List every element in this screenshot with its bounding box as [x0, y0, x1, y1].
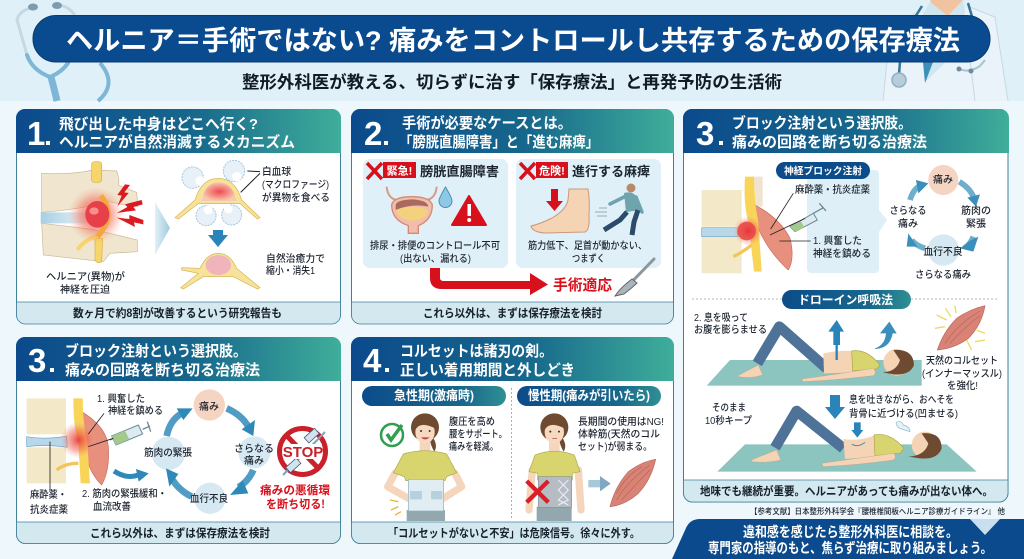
illustration: herniated disc pressing nerve [41, 162, 143, 263]
illustration: inhale pose on mat [707, 320, 922, 386]
icon: stop sign [280, 428, 326, 475]
callout: light blue box [807, 170, 887, 273]
label: keep ten seconds [705, 402, 752, 427]
label: hernia compresses nerve: 神経を圧迫 [60, 283, 110, 296]
panel 4 footer [352, 522, 674, 544]
label: calm nerve: 1. 興奮した [813, 234, 862, 247]
label: bladder text: (出ない、漏れる) [400, 252, 471, 265]
icon: water drop [439, 187, 452, 208]
illustration: woman wearing corset smiling [388, 413, 462, 521]
chart: pain cycle: 痛み [898, 217, 918, 230]
chart: vicious cycle of pain: 血行不良 [190, 492, 228, 505]
label: white blood cells: (マクロファージ) [262, 179, 329, 191]
pill: nerve block injection: 神経ブロック注射 [784, 164, 862, 178]
label: acute text: 痛みを軽減。 [449, 440, 498, 453]
panel header [16, 337, 341, 381]
panel footer: これら以外は、まずは保存療法を検討 [90, 526, 270, 540]
label: calm nerve [97, 392, 163, 417]
icon: red X [520, 163, 535, 179]
label: anesthetic: 麻酔薬・抗炎症薬 [795, 183, 870, 196]
panel 4 header: 4 [363, 342, 382, 379]
illustration: woman with corset warning [527, 413, 656, 521]
title banner: ヘルニア＝手術ではない? 痛みをコントロールし共存するための保存療法 [66, 26, 960, 56]
panel: 3 block injection lower left [16, 337, 341, 544]
panel 1 header: 1 [27, 115, 45, 152]
panel 1 header: ヘルニアが自然消滅するメカニズム [59, 133, 295, 151]
panel 2 header: 2 [364, 115, 382, 152]
panel 4 header [351, 337, 674, 381]
badge: danger: 危険! [539, 164, 565, 178]
panel: 4 corset [351, 337, 674, 544]
illustration: stumbling person [595, 184, 642, 235]
panel 2 header [351, 109, 674, 153]
panel 2 header: 「膀胱直腸障害」と「進む麻痺」 [399, 133, 599, 151]
label: chronic text: セット)が弱まる。 [578, 440, 652, 453]
label: white blood cells: が異物を食べる [262, 191, 330, 204]
right panel header [683, 109, 1009, 153]
chart: vicious cycle of pain: 筋肉の緊張 [144, 446, 192, 459]
arrow: down [208, 230, 228, 247]
label: chronic text: 体幹筋(天然のコル [578, 428, 660, 440]
panel: 1 natural resorption [16, 109, 341, 324]
icon: red X [367, 163, 382, 179]
label: break vicious cycle [260, 483, 331, 511]
chart: pain cycle: 血行不良 [924, 245, 962, 258]
label: calm nerve: 1. 興奮した [97, 392, 145, 405]
panel 1 footer [16, 302, 340, 324]
label: exhale [849, 393, 958, 420]
pill: nerve block injection [776, 162, 870, 179]
label: acute text: 腰をサポート。 [449, 428, 507, 440]
sub-panel: progressive paralysis [516, 159, 661, 268]
badge: urgent [383, 162, 416, 178]
label: paralysis text: つまずく [572, 253, 605, 265]
heading: paralysis: 進行する麻痺 [572, 164, 650, 179]
chart: vicious cycle of pain: さらなる [234, 443, 274, 455]
label: anesthetic: 抗炎症薬 [30, 503, 68, 516]
panel 4 header: コルセットは諸刃の剣。 [400, 342, 553, 360]
right panel footer [684, 480, 1008, 502]
panel 1 footer: 数ヶ月で約8割が改善するという研究報告も [73, 306, 282, 320]
illustration: macrophages eating hernia [175, 160, 260, 226]
label: muscle relief: 2. 筋肉の緊張緩和・ [82, 487, 167, 500]
panel header: 3 [28, 342, 46, 379]
label: acute text: 腹圧を高め [449, 415, 495, 428]
label: break vicious cycle: 痛みの悪循環 [260, 483, 331, 497]
label: paralysis text [528, 239, 647, 265]
label: muscle relief [82, 487, 167, 513]
panel: 3 block injection and draw-in right [683, 109, 1009, 502]
panel 1 header: 飛び出した中身はどこへ行く? [59, 115, 258, 133]
label: natural corset: 天然のコルセット [926, 354, 998, 367]
pill: chronic phase [517, 386, 661, 406]
sub-panel: bladder and bowel disorder [363, 159, 508, 268]
label: calm nerve: 神経を鎮める [813, 247, 871, 260]
illustration: nerve block anatomy [27, 398, 151, 490]
chart: vicious cycle of pain [144, 389, 274, 514]
pill: draw-in breathing: ドローイン呼吸法 [798, 292, 893, 307]
panel 2 header: 手術が必要なケースとは。 [402, 114, 572, 132]
label: calm nerve [813, 234, 871, 260]
label: white blood cells: 白血球 [262, 165, 291, 178]
label: calm nerve: 神経を鎮める [108, 404, 163, 417]
subtitle: 整形外科医が教える、切らずに治す「保存療法」と再発予防の生活術 [242, 72, 782, 92]
illustration: shrunken hernia [181, 253, 260, 289]
arrow: red down [546, 189, 563, 211]
pill: acute phase: 急性期(激痛時) [394, 388, 474, 403]
label: keep ten seconds: 10秒キープ [705, 414, 752, 427]
label: natural healing: 自然治癒力で [266, 252, 325, 265]
arrow: chevron to next step [155, 202, 170, 255]
label: exhale: 背骨に近づける(凹ませる) [849, 407, 958, 420]
right panel footer: 地味でも継続が重要。ヘルニアがあっても痛みが出ない体へ。 [700, 484, 993, 498]
label: chronic text: 長期間の使用はNG! [578, 415, 664, 428]
label: exhale: 息を吐きながら、おへそを [849, 393, 954, 406]
label: anesthetic [30, 488, 68, 516]
label: bladder text [370, 239, 500, 265]
badge: danger [536, 162, 568, 178]
pill: draw-in breathing [782, 290, 911, 309]
chart: vicious cycle of pain: 痛み [199, 400, 219, 413]
chart: pain cycle [890, 165, 991, 281]
heading: bladder disorder: 膀胱直腸障害 [420, 164, 499, 179]
illustration: exhale pose on mat [717, 411, 977, 472]
label: paralysis text: 筋力低下、足首が動かない、 [528, 239, 647, 252]
label: bladder text: 排尿・排便のコントロール不可 [370, 239, 500, 252]
illustration: injection anatomy [702, 177, 826, 273]
label: natural healing: 縮小・消失1 [266, 264, 315, 277]
illustration: dropped foot [531, 189, 589, 233]
label: muscle relief: 血流改善 [93, 500, 131, 513]
arrow: to cycle [114, 469, 149, 482]
bottom banner: 違和感を感じたら整形外科医に相談を。 [743, 524, 958, 540]
label: anesthetic: 麻酔薬・ [30, 488, 67, 501]
chart: pain cycle: 筋肉の [961, 204, 991, 217]
label: natural corset: (インナーマッスル) [922, 368, 1002, 380]
chart: vicious cycle of pain: 痛み [244, 454, 264, 467]
panel 2 footer [352, 302, 674, 324]
label: break vicious cycle: を断ち切る! [266, 497, 325, 511]
panel header: 痛みの回路を断ち切る治療法 [65, 361, 260, 379]
panel 2 footer: これら以外は、まずは保存療法を検討 [423, 306, 602, 320]
right panel header: 3 [696, 115, 714, 152]
pill: chronic phase: 慢性期(痛みが引いたら) [528, 388, 650, 403]
label: acute text [449, 415, 507, 453]
label: chronic text [578, 415, 664, 453]
chart: pain cycle: さらなる [890, 205, 926, 217]
label: natural corset [922, 354, 1002, 392]
label: inhale: 2. 息を吸って [694, 311, 748, 324]
bottom banner [672, 519, 1024, 559]
panel 4 header: 正しい着用期間と外しどき [400, 361, 575, 379]
panel footer [16, 522, 340, 544]
label: natural corset: を強化! [947, 379, 978, 392]
label: keep ten seconds: そのまま [712, 402, 746, 414]
icon: scalpel [615, 259, 654, 296]
icon: stethoscope background left [17, 2, 109, 101]
arrow: to surgery indication [430, 268, 548, 295]
label: surgery indication: 手術適応 [553, 276, 612, 294]
icon: stop sign: STOP [283, 444, 323, 461]
label: inhale: お腹を膨らませる [694, 323, 767, 336]
panel header: ブロック注射という選択肢。 [65, 342, 247, 360]
icon: warning triangle [452, 196, 486, 225]
right panel header: 痛みの回路を断ち切る治療法 [732, 133, 927, 151]
chart: pain cycle: さらなる痛み [915, 268, 971, 281]
reference note: 【参考文献】日本整形外科学会『腰椎椎間板ヘルニア診療ガイドライン』 他 [750, 506, 1005, 516]
right panel header: ブロック注射という選択肢。 [732, 114, 912, 132]
panel 4 footer: 「コルセットがないと不安」は危険信号。徐々に外す。 [388, 526, 640, 540]
chart: pain cycle: 痛み [933, 173, 953, 186]
title banner [33, 16, 990, 62]
illustration: doctor background right [883, 0, 1008, 101]
label: inhale [694, 311, 767, 336]
label: white blood cells [262, 165, 330, 204]
label: hernia compresses nerve [46, 270, 125, 296]
label: natural healing [266, 252, 325, 277]
illustration: bladder [387, 187, 437, 233]
arrow: blue down [825, 395, 845, 419]
panel 1 header [16, 109, 341, 153]
icon: green check [381, 424, 403, 446]
badge: urgent: 緊急! [387, 164, 412, 178]
chart: pain cycle: 緊張 [966, 218, 986, 230]
illustration: strong muscle [935, 306, 985, 350]
label: hernia compresses nerve: ヘルニア(異物)が [46, 270, 125, 283]
panel: 2 surgery cases [351, 109, 674, 324]
pill: acute phase [362, 386, 506, 406]
